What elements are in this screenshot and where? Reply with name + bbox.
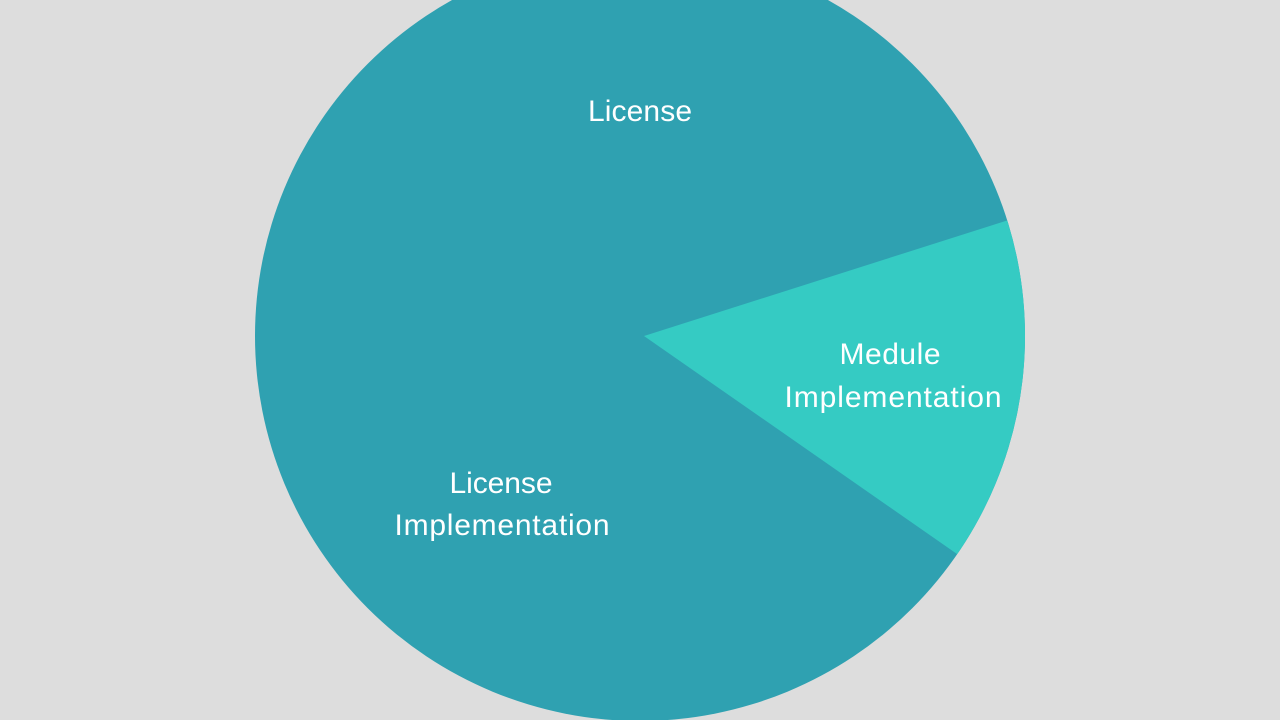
label: License Implementation: License xyxy=(450,467,552,500)
label: Module Implementation: Implementation xyxy=(784,381,1002,414)
label: Module Implementation xyxy=(784,338,1002,414)
label: License Implementation: Implementation xyxy=(394,509,610,542)
label: License Implementation xyxy=(394,467,610,542)
label: Module Implementation: Medule xyxy=(840,338,940,371)
pie circle: license and license implementation slices xyxy=(255,0,1025,720)
slice: module implementation xyxy=(644,220,1025,554)
label: License: License xyxy=(588,95,692,128)
pie chart xyxy=(255,0,1025,720)
